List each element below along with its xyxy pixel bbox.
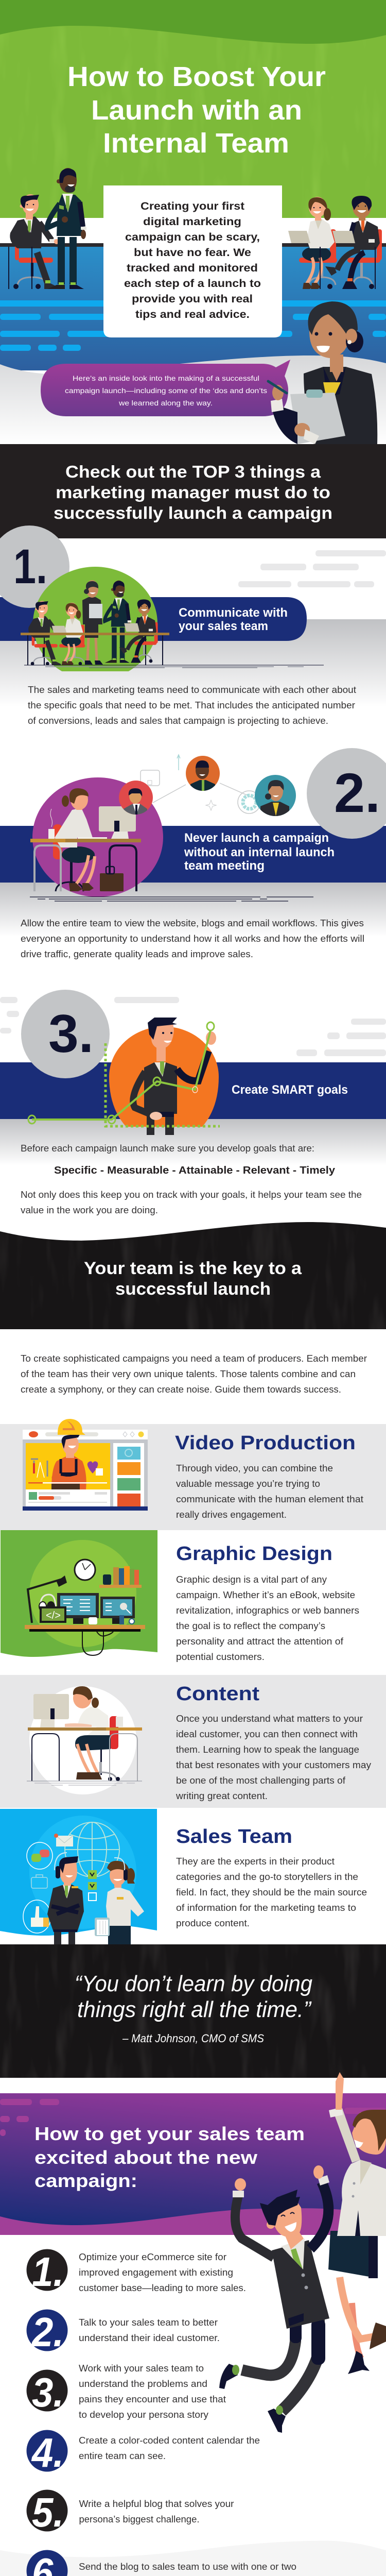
banner text: Never launch a campaign [184, 831, 329, 845]
body text: field. In fact, they should be the main source [176, 1887, 367, 1897]
paragraph [21, 1143, 362, 1215]
list: sales team steps [27, 2249, 296, 2576]
intro paragraph [21, 1353, 367, 1395]
intro card: tips and real advice. [135, 309, 250, 320]
title: How to Boost Your [67, 61, 326, 92]
heading: Content [176, 1683, 259, 1705]
number circle [307, 748, 386, 839]
panel: top 3 heading [0, 444, 386, 538]
illustration: woman with clipboard [268, 301, 377, 444]
body text [176, 1463, 363, 1520]
illustration: woman leaning at computer [28, 1686, 142, 1781]
icon: briefcase [31, 1875, 47, 1888]
green blob [33, 567, 157, 680]
number circle: 3. [48, 1004, 94, 1064]
quote attribution: – Matt Johnson, CMO of SMS [122, 2032, 264, 2045]
illustration: standing man [47, 168, 86, 289]
number circle: 2. [334, 761, 380, 824]
illustration: team at table [21, 580, 169, 665]
body text [176, 1574, 359, 1662]
illustration: globe and icons [65, 1822, 119, 1877]
pills [238, 550, 386, 587]
body text: the goal is to reflect the company’s [176, 1621, 325, 1631]
icon: envelope [54, 1834, 73, 1846]
intro card: each step of a launch to [124, 278, 261, 290]
floor lines [27, 1781, 142, 1782]
illustration: woman at computer [30, 788, 141, 891]
heading [84, 1259, 302, 1299]
heading: Graphic Design [176, 1543, 332, 1565]
blue background [0, 247, 386, 370]
heading: Video Production [175, 1432, 356, 1454]
avatar: red man [119, 781, 153, 817]
green texture [0, 0, 386, 218]
pills [0, 997, 386, 1056]
paragraph: drive traffic, generate quality leads and improve sales. [21, 949, 253, 959]
grey fade [0, 883, 386, 937]
intro card: provide you with real [132, 293, 253, 305]
chart: green growth line [28, 1022, 220, 1126]
intro card: Creating your first [141, 200, 244, 212]
panel: team is the key [0, 1222, 386, 1329]
body text [176, 1714, 371, 1801]
step 5: Write a helpful blog that solves your [79, 2499, 234, 2509]
body text: writing great content. [176, 1791, 268, 1801]
panel: step 1 [0, 526, 386, 726]
body text: Graphic design is a vital part of any [176, 1574, 327, 1585]
intro card: campaign can be scary, [125, 231, 260, 243]
body text: They are the experts in their product [176, 1856, 335, 1867]
banner text: Communicate with [179, 606, 288, 620]
heading: successfully launch a campaign [54, 503, 332, 522]
illustration: jumping man [219, 2165, 329, 2433]
step 1: 1. [32, 2249, 64, 2295]
white band [0, 218, 386, 244]
body text: valuable message you’re trying to [176, 1479, 320, 1489]
paragraph: Specific - Measurable - Attainable - Relevant - Timely [54, 1165, 336, 1176]
body text: campaign. Whether it’s an eBook, website [176, 1590, 355, 1600]
step 2 [27, 2309, 220, 2355]
step 5: persona’s biggest challenge. [79, 2514, 200, 2524]
black wave background [0, 1222, 386, 1329]
heading: Check out the TOP 3 things a [65, 462, 321, 481]
body text: revitalization, infographics or web banners [176, 1605, 359, 1616]
banner text: team meeting [184, 859, 265, 873]
grey background [0, 1675, 386, 1808]
quote text: things right all the time.” [77, 1997, 312, 2022]
number circle [21, 990, 110, 1078]
illustration: seated man right [325, 196, 382, 289]
desk frame legs [9, 247, 375, 289]
grey fade [0, 619, 386, 707]
heading [34, 2123, 305, 2191]
paragraph: everyone an opportunity to understand how it all works and how the efforts will [21, 934, 364, 944]
paragraph: The sales and marketing teams need to communicate with each other about [28, 685, 356, 695]
panel: sales team excited [0, 2072, 386, 2433]
title [67, 61, 326, 159]
black background [0, 1944, 386, 2078]
title: Launch with an [91, 95, 302, 126]
body text [176, 1856, 367, 1928]
step 2: Talk to your sales team to better [79, 2317, 218, 2328]
paragraph: the specific goals that need to be met. That includes the anticipated number [28, 700, 355, 710]
illustration: design desk: </> [46, 1610, 61, 1621]
step 5 [27, 2489, 234, 2535]
body text: produce content. [176, 1918, 250, 1928]
paragraph: Before each campaign launch make sure you develop goals that are: [21, 1143, 314, 1154]
lighter blob [29, 1816, 136, 1929]
avatar: orange man [186, 756, 220, 793]
step 6 [27, 2550, 296, 2576]
step 4: 4. [31, 2430, 64, 2476]
panel: content [0, 1675, 386, 1808]
title: Internal Team [103, 128, 289, 159]
paragraph: value in the work you are doing. [21, 1205, 158, 1215]
paragraph: Allow the entire team to view the website, blogs and email workflows. This gives [21, 918, 364, 928]
speech bubble: Here’s an inside look into the making of a successful [73, 374, 259, 382]
heading: Sales Team [176, 1826, 292, 1848]
step 3: to develop your persona story [79, 2410, 208, 2420]
intro paragraph: create a symphony, or they can create noise. Guide them towards success. [21, 1384, 341, 1395]
floor lines [30, 897, 313, 901]
intro paragraph: of the team has their very own unique talents. Those talents combine and can [21, 1369, 356, 1379]
navy band [0, 1062, 386, 1119]
panel: grey wave behind list [0, 2541, 386, 2576]
panel: graphic design [1, 1530, 359, 1662]
step 4 [27, 2430, 260, 2476]
heading: excited about the new [34, 2147, 258, 2168]
pale wave [0, 2541, 386, 2576]
body text: categories and the go-to storytellers in the [176, 1872, 358, 1882]
blue wavy square [0, 1809, 157, 1936]
navy banner [0, 597, 307, 641]
avatar: teal woman [255, 775, 296, 819]
speech bubble [41, 360, 290, 416]
body text: really drives engagement. [176, 1510, 287, 1520]
intro card: but have no fear. We [134, 247, 251, 259]
illustration: man in suit [133, 1018, 216, 1135]
paragraph [21, 918, 364, 959]
step 2: 2. [31, 2309, 64, 2355]
green wavy square [1, 1530, 157, 1657]
paragraph [28, 685, 356, 726]
speech bubble: we learned along the way. [118, 399, 213, 407]
white blob [29, 1686, 136, 1794]
heading: Your team is the key to a [84, 1259, 302, 1278]
panel: step 2 [0, 748, 386, 959]
panel: video production [0, 1419, 386, 1530]
step 4: entire team can see. [79, 2451, 166, 2461]
pills [0, 2099, 386, 2136]
illustration: man with headset [47, 1853, 84, 1944]
quote text: “You don’t learn by doing [75, 1971, 312, 1996]
grey background [0, 1424, 386, 1530]
illustration: woman with headset [95, 1858, 144, 1944]
icon: checkboxes [88, 1870, 97, 1901]
panel: hero [0, 0, 386, 444]
body text: them. Learning how to speak the language [176, 1744, 359, 1755]
black texture [0, 1222, 386, 1329]
step 1: Optimize your eCommerce site for [79, 2252, 226, 2262]
step 3: understand the problems and [79, 2379, 207, 2389]
step 2: understand their ideal customer. [79, 2333, 220, 2343]
panel: quote [0, 1944, 386, 2078]
illustration: video player with worker [23, 1419, 148, 1511]
navy band [0, 826, 386, 883]
number circle [0, 526, 69, 608]
desk [0, 243, 386, 247]
heading: successful launch [115, 1279, 271, 1299]
step 1: customer base—leading to more sales. [79, 2283, 246, 2293]
purple wave [0, 2208, 386, 2235]
network lines and icons [141, 755, 260, 814]
illustration: jumping woman [328, 2072, 386, 2374]
step 5: 5. [32, 2489, 64, 2535]
banner text: without an internal launch [184, 845, 335, 859]
intro card: digital marketing [143, 216, 241, 228]
paragraph: Not only does this keep you on track with your goals, it helps your team see the [21, 1190, 362, 1200]
banner text: Create SMART goals [232, 1083, 348, 1097]
body text: be one of the most challenging parts of [176, 1775, 346, 1786]
step 3 [27, 2363, 226, 2420]
step 3: 3. [32, 2369, 64, 2415]
heading: marketing manager must do to [56, 483, 330, 502]
black background [0, 444, 386, 538]
quote text [75, 1971, 312, 2022]
body text: potential customers. [176, 1652, 265, 1662]
illustration: seated man [10, 194, 59, 289]
number circle: 1. [13, 539, 47, 594]
step 6: Send the blog to sales team to use with one or two [79, 2562, 296, 2572]
step 3: pains they encounter and use that [79, 2394, 226, 2404]
banner text: your sales team [179, 619, 268, 633]
icon: thumbs up [23, 1900, 51, 1933]
body text: ideal customer, you can then connect with [176, 1729, 358, 1739]
green background [0, 0, 386, 218]
purple gradient background [0, 2093, 386, 2235]
step 3: Work with your sales team to [79, 2363, 204, 2374]
body text: communicate with the human element that [176, 1494, 363, 1504]
grey fade [0, 1119, 386, 1165]
grey wave [0, 355, 386, 444]
black texture [0, 1944, 386, 2078]
intro card [103, 185, 282, 337]
body text: of information for the marketing teams to [176, 1903, 356, 1913]
banner text [184, 831, 335, 873]
heading: How to get your sales team [34, 2123, 305, 2144]
heading: campaign: [34, 2170, 137, 2191]
body text: Through video, you can combine the [176, 1463, 333, 1473]
step 1: improved engagement with existing [79, 2267, 233, 2278]
intro card: tracked and monitored [127, 262, 258, 274]
panel: step 3 [0, 990, 386, 1215]
panel: sales team [0, 1809, 367, 1944]
body text: personality and attract the attention of [176, 1636, 344, 1647]
floor lines [24, 665, 324, 666]
heading [54, 462, 332, 522]
step 4: Create a color-coded content calendar the [79, 2435, 260, 2446]
body text: that best resonates with your customers may [176, 1760, 371, 1770]
orange blob [109, 1027, 219, 1127]
banner text [179, 606, 288, 633]
body text: Once you understand what matters to your [176, 1714, 363, 1724]
speech bubble: campaign launch—including some of the ‘dos and don’ts [65, 386, 267, 395]
dark green top wave [0, 0, 386, 44]
lighter blob [29, 1540, 136, 1647]
purple blob [32, 777, 163, 897]
step 1 [27, 2249, 246, 2295]
intro paragraph: To create sophisticated campaigns you need a team of producers. Each member [21, 1353, 367, 1364]
illustration: seated woman [288, 197, 337, 289]
paragraph: of conversions, leads and sales that campaign is projecting to achieve. [28, 716, 328, 726]
blue dash bars [0, 300, 386, 351]
illustration: design desk [25, 1560, 145, 1655]
icon: chat bubbles [27, 1842, 52, 1869]
